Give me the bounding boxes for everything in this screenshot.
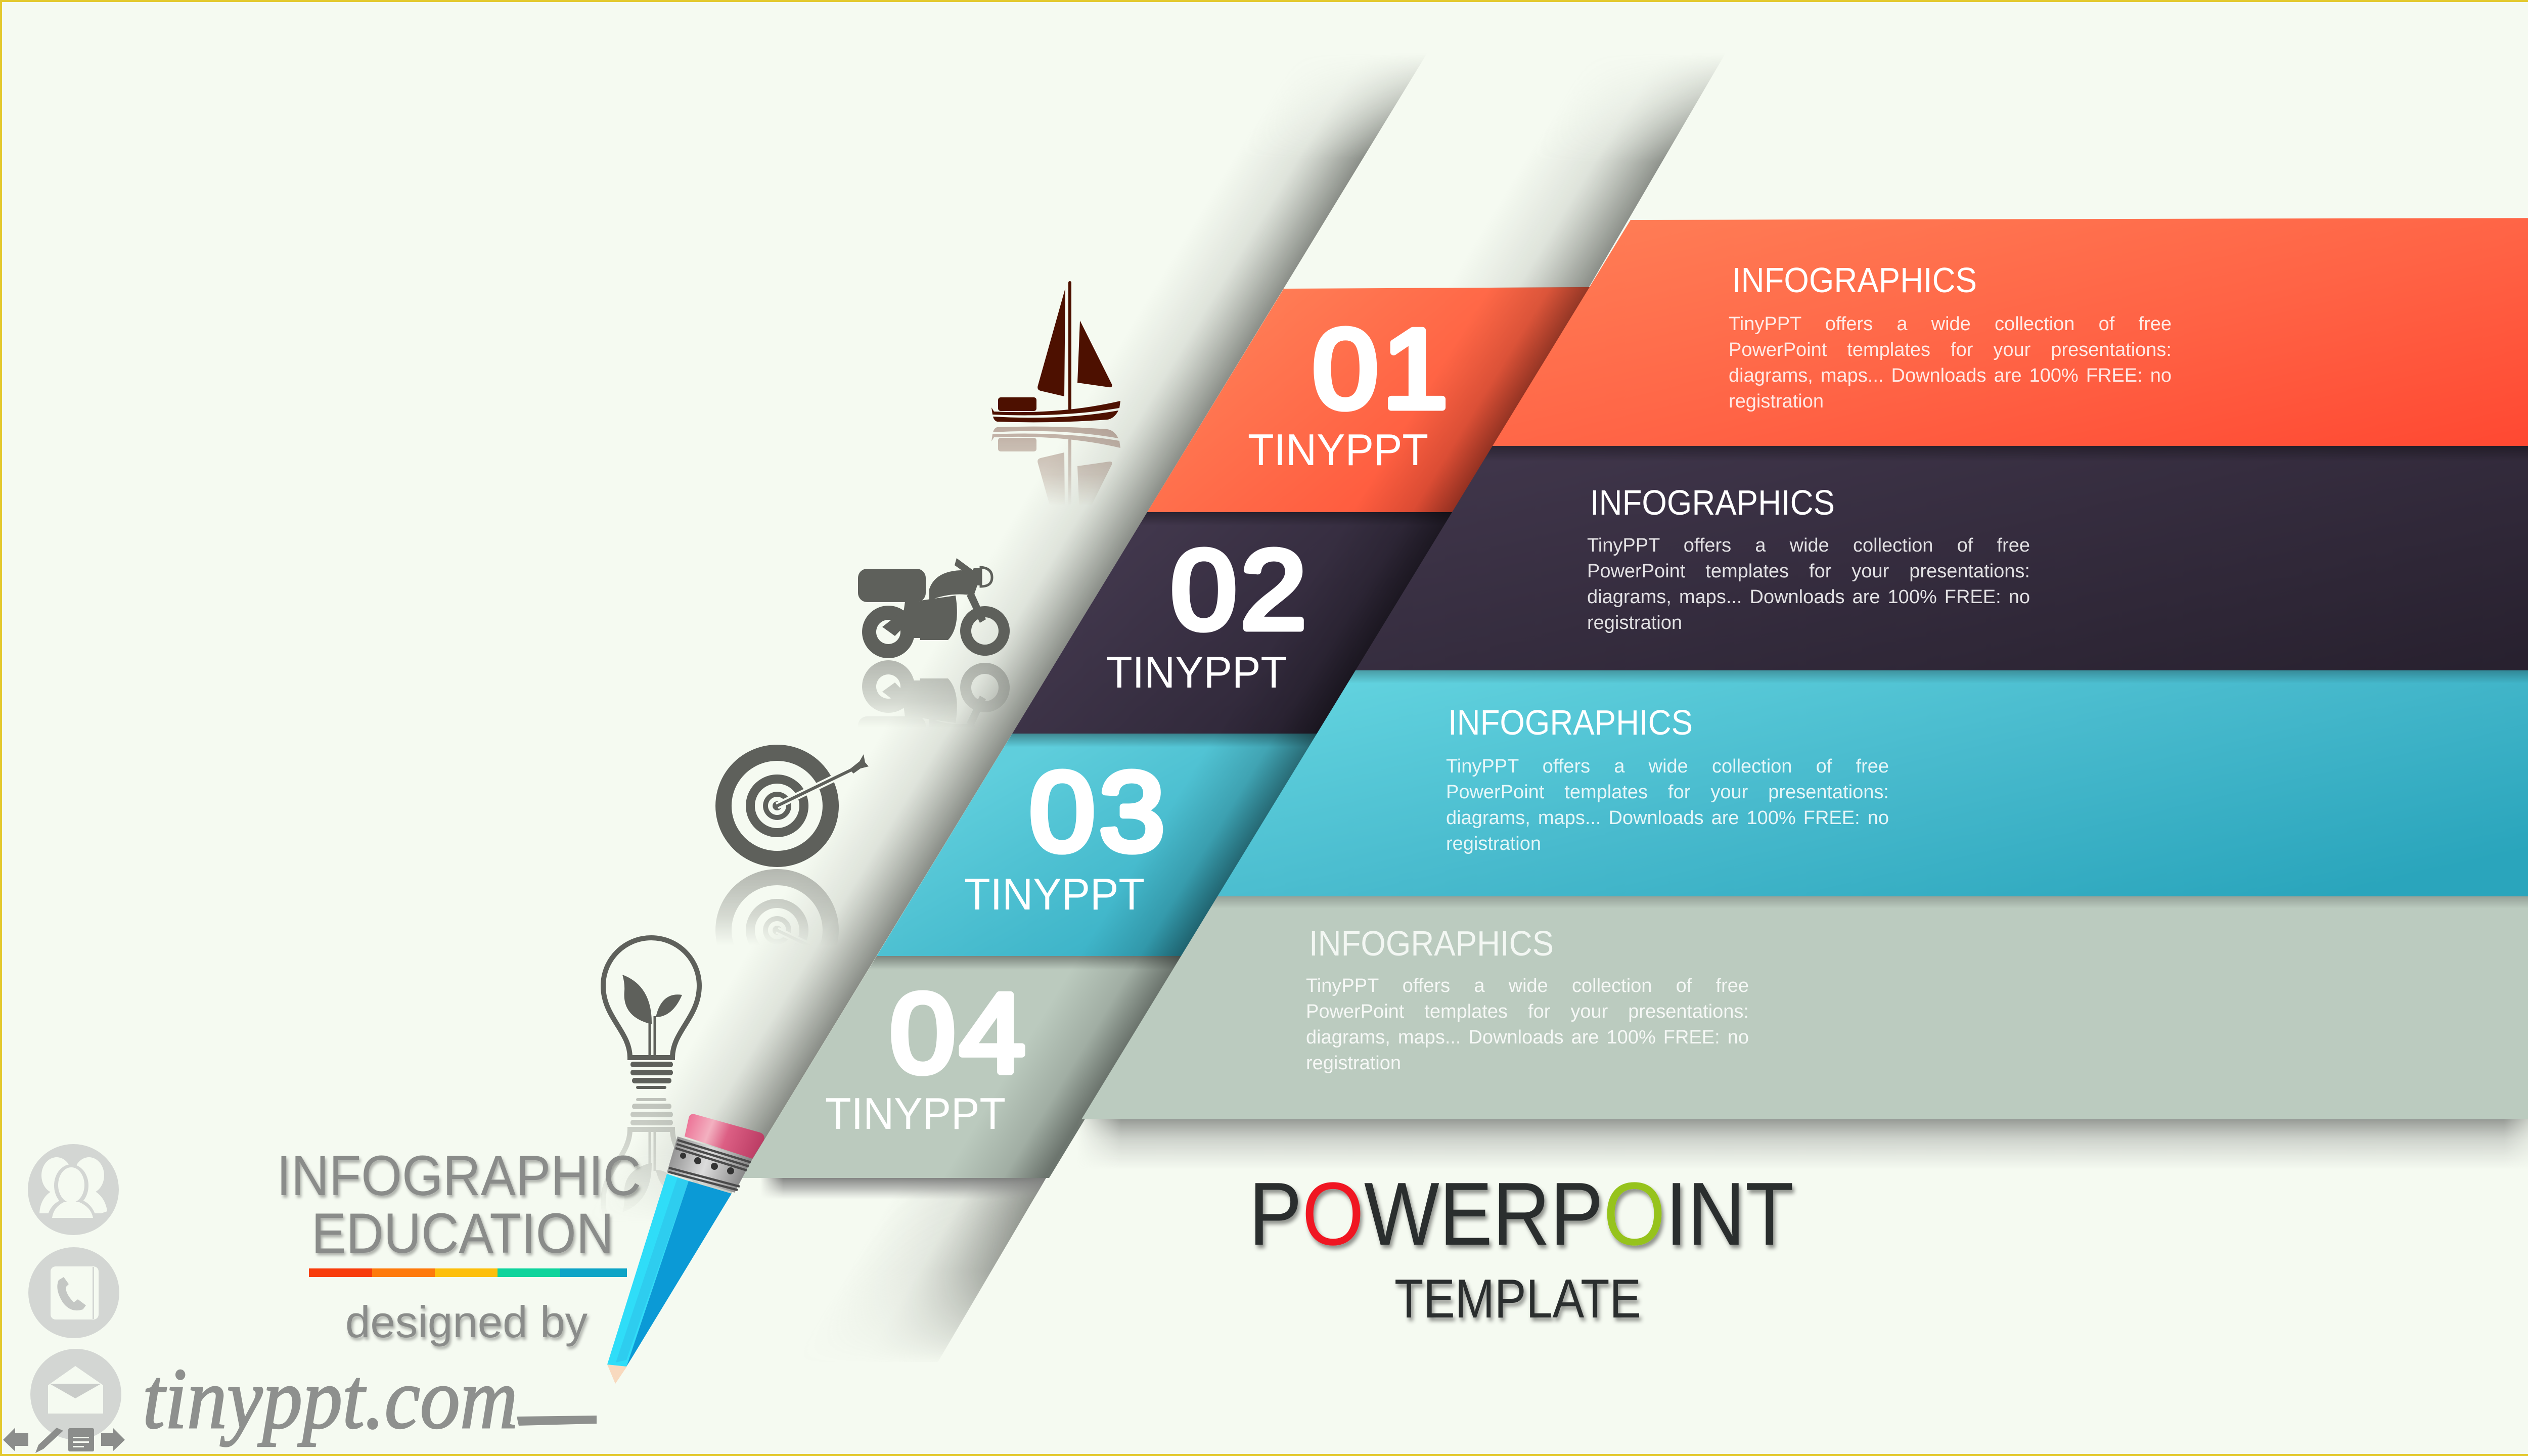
strip edge shading — [1483, 446, 2528, 461]
nav right arrow — [101, 1428, 125, 1451]
icon: target with arrow — [715, 745, 869, 991]
pencil light side — [607, 1174, 689, 1367]
body text strip 2 — [1587, 535, 2030, 633]
heading: INFOGRAPHIC EDUCATION: EDUCATION — [311, 1202, 614, 1265]
pencil ferrule — [667, 1136, 752, 1193]
body text strip 3: TinyPPT offers a wide collection of free — [1446, 756, 1889, 777]
logo: tinyppt.com: tinyppt.com — [143, 1351, 518, 1447]
panel: information strips — [1081, 218, 2528, 1119]
nav pencil — [35, 1428, 63, 1453]
pencil eraser — [685, 1114, 764, 1159]
strip 3 — [1217, 670, 2528, 896]
panel 02 — [1012, 512, 1454, 734]
numbers and labels — [825, 306, 1452, 1139]
label 03: TINYPPT — [964, 869, 1145, 919]
icon: sailboat — [991, 281, 1120, 568]
strip headings — [1309, 260, 1977, 963]
body text strip 1: TinyPPT offers a wide collection of free — [1729, 313, 2172, 335]
panel 03 — [877, 734, 1320, 956]
body text strip 1: diagrams, maps... Downloads are 100% FREE: no — [1729, 365, 2172, 386]
subtitle: TEMPLATE: TEMPLATE — [1394, 1268, 1641, 1330]
icon: contacts circle — [28, 1144, 119, 1235]
pencil wood tip — [607, 1364, 627, 1384]
icon: phone book circle — [28, 1247, 119, 1338]
icon: pencil — [607, 1114, 764, 1384]
number 02: 02 — [1171, 527, 1311, 653]
label 04: TINYPPT — [825, 1088, 1006, 1139]
panel: number panels — [741, 287, 1591, 1178]
heading strip 4: INFOGRAPHICS — [1309, 924, 1554, 963]
rainbow bar — [309, 1268, 627, 1277]
pencil dark side — [626, 1181, 732, 1367]
panel edge shading — [894, 287, 1591, 1178]
heading strip 3: INFOGRAPHICS — [1448, 703, 1693, 742]
nav document — [68, 1428, 94, 1451]
ferrule holes — [680, 1153, 734, 1174]
navigation icons — [3, 1428, 125, 1453]
heading: INFOGRAPHIC EDUCATION — [277, 1144, 641, 1265]
icon: motorcycle — [858, 558, 1010, 760]
body text strip 2: TinyPPT offers a wide collection of free — [1587, 535, 2030, 556]
panel 01 — [1147, 287, 1591, 512]
body text strip 4: diagrams, maps... Downloads are 100% FREE: no — [1306, 1027, 1749, 1048]
strip 4 — [1081, 896, 2528, 1119]
body text strip 2: PowerPoint templates for your presentations: — [1587, 561, 2030, 582]
icon: envelope circle — [30, 1349, 121, 1440]
body text strip 2: registration — [1587, 612, 1682, 633]
heading: INFOGRAPHIC EDUCATION: INFOGRAPHIC — [277, 1144, 641, 1207]
label 02: TINYPPT — [1106, 647, 1287, 697]
target reflection — [715, 869, 869, 991]
shadow under strip 4 — [1081, 1119, 2528, 1163]
pencil middle side — [616, 1177, 689, 1362]
body text strip 3: PowerPoint templates for your presentations: — [1446, 782, 1889, 803]
strip 1 — [1493, 218, 2528, 446]
icon: light bulb with leaves — [603, 938, 699, 1249]
body text strip 3 — [1446, 756, 1889, 854]
number 03: 03 — [1029, 749, 1169, 875]
body text strip 4 — [1306, 975, 1749, 1074]
body text strip 3: diagrams, maps... Downloads are 100% FREE: no — [1446, 807, 1889, 829]
body text strip 3: registration — [1446, 833, 1541, 854]
motorcycle reflection — [858, 660, 1010, 760]
body text strip 2: diagrams, maps... Downloads are 100% FREE: no — [1587, 586, 2030, 608]
panel 04 — [741, 956, 1184, 1178]
boat reflection — [991, 427, 1120, 568]
shadow along left diagonal fold — [643, 61, 1422, 1199]
label 01: TINYPPT — [1248, 425, 1428, 475]
nav left arrow — [3, 1428, 28, 1451]
shadow under panel 04 — [760, 1178, 1046, 1199]
heading strip 1: INFOGRAPHICS — [1732, 260, 1977, 300]
body text strip 1: PowerPoint templates for your presentations: — [1729, 339, 2172, 360]
bulb reflection — [603, 1098, 699, 1249]
shadow along right diagonal fold, upper band — [1471, 61, 1721, 288]
strip 2 — [1356, 446, 2528, 670]
heading strip 2: INFOGRAPHICS — [1590, 483, 1835, 522]
number 01: 01 — [1313, 306, 1452, 432]
body text strip 4: registration — [1306, 1053, 1401, 1074]
text: designed by: designed by — [345, 1297, 588, 1347]
title: POWERPOINT: POWERPOINT — [1249, 1164, 1794, 1264]
shadow left of diagonal below panel 04 — [875, 1178, 1046, 1356]
body text strip 4: PowerPoint templates for your presentations: — [1306, 1001, 1749, 1022]
body text strip 1 — [1729, 313, 2172, 412]
number 04: 04 — [890, 971, 1029, 1096]
body text strip 4: TinyPPT offers a wide collection of free — [1306, 975, 1749, 996]
body text strip 1: registration — [1729, 391, 1824, 412]
